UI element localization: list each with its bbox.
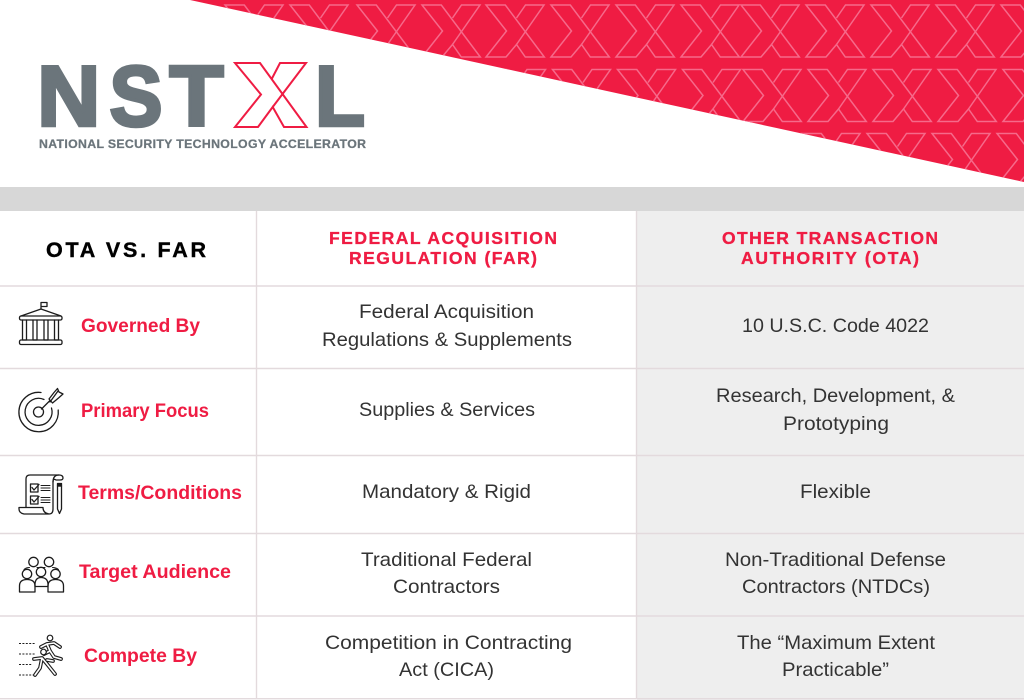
NSTXL logo: L xyxy=(315,50,365,144)
OTA value xyxy=(737,632,936,681)
FAR column heading: REGULATION (FAR) xyxy=(349,248,537,268)
label: Primary Focus xyxy=(81,400,209,422)
title: OTA vs. FAR: OTA VS. FAR xyxy=(46,238,206,262)
row: Governed By xyxy=(20,301,929,351)
OTA value: Flexible xyxy=(800,481,871,503)
icon: target with arrow xyxy=(19,388,63,432)
logo tagline: NATIONAL SECURITY TECHNOLOGY ACCELERATOR xyxy=(39,137,366,151)
label: Terms/Conditions xyxy=(78,482,242,504)
label: Governed By xyxy=(81,315,200,337)
logo X mark xyxy=(235,63,306,127)
label: Compete By xyxy=(84,645,197,667)
FAR value: Competition in Contracting xyxy=(325,632,572,654)
icon: group of people xyxy=(20,557,64,592)
OTA value: The “Maximum Extent xyxy=(737,632,936,654)
OTA column heading: OTHER TRANSACTION xyxy=(722,228,938,248)
row: Terms/Conditions xyxy=(19,475,871,514)
OTA value: Research, Development, & xyxy=(716,385,955,407)
OTA value: Practicable” xyxy=(782,659,889,681)
OTA value: Contractors (NTDCs) xyxy=(742,576,930,598)
FAR value: Regulations & Supplements xyxy=(322,329,572,351)
label: Target Audience xyxy=(79,561,231,583)
gray band xyxy=(0,187,1024,211)
NSTXL logo: T xyxy=(170,50,224,144)
NSTXL logo: S xyxy=(110,50,162,144)
icon: checklist scroll and pencil xyxy=(19,475,63,514)
FAR value: Contractors xyxy=(393,576,500,598)
red diagonal banner with X pattern xyxy=(190,0,1024,186)
FAR column heading xyxy=(329,228,557,268)
table header row xyxy=(46,228,938,268)
FAR value xyxy=(325,632,572,681)
row: Target Audience xyxy=(20,549,946,598)
FAR column heading: FEDERAL ACQUISITION xyxy=(329,228,557,248)
icon: runners with speed lines xyxy=(19,635,61,675)
OTA value: 10 U.S.C. Code 4022 xyxy=(742,315,929,337)
OTA column background xyxy=(637,211,1024,700)
FAR value xyxy=(322,301,572,351)
icon: government building xyxy=(20,302,62,344)
FAR value: Federal Acquisition xyxy=(359,301,534,323)
OTA column heading: AUTHORITY (OTA) xyxy=(741,248,919,268)
NSTXL logo xyxy=(37,50,366,151)
OTA column heading xyxy=(722,228,938,268)
row: Compete By xyxy=(19,632,936,681)
OTA value xyxy=(725,549,946,598)
FAR value: Traditional Federal xyxy=(361,549,532,571)
NSTXL logo: N xyxy=(37,50,100,144)
OTA value xyxy=(716,385,955,435)
FAR value: Mandatory & Rigid xyxy=(362,481,531,503)
OTA value: Prototyping xyxy=(783,413,889,435)
FAR value xyxy=(361,549,532,598)
row: Primary Focus xyxy=(19,385,955,435)
OTA value: Non-Traditional Defense xyxy=(725,549,946,571)
FAR value: Act (CICA) xyxy=(399,659,494,681)
FAR value: Supplies & Services xyxy=(359,399,535,421)
